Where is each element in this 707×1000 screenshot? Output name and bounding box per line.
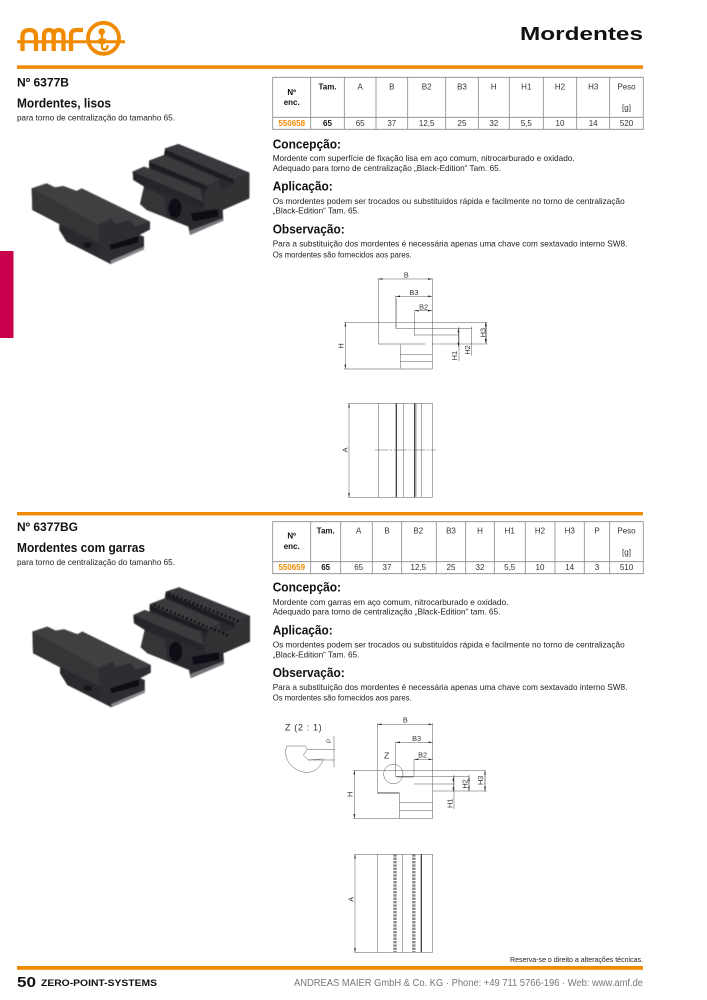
footer rule [17, 966, 643, 970]
technical drawing: 6377BG: B2 [418, 751, 427, 760]
data table: 6377BG [273, 522, 643, 574]
technical drawing: 6377BG: H1 [445, 799, 454, 808]
footer contact line: ANDREAS MAIER GmbH & Co. KG · Phone: +49 711 5766-196 · Web: www.amf.de [294, 978, 643, 989]
technical drawing: 6377B: B [404, 271, 409, 280]
data table: 6377B: 65 [356, 119, 365, 128]
data table: 6377BG: H2 [535, 527, 546, 536]
data table: 6377BG: Tam. [317, 527, 335, 536]
data table: 6377BG: 550659 [278, 563, 306, 572]
technical drawing: 6377BG [285, 716, 487, 952]
text block: description 6377B: Adequado para torno de centralização „Black-Edition“ Tam. 65. [273, 163, 501, 173]
section rule [17, 512, 643, 515]
data table: 6377B: 32 [489, 119, 499, 128]
data table: 6377BG: Peso [617, 527, 636, 536]
technical drawing: 6377B: H2 [463, 345, 472, 355]
text block: description 6377BG: Os mordentes são fornecidos aos pares. [273, 692, 412, 702]
technical drawing: 6377BG: B3 [412, 734, 421, 743]
data table: 6377B: Tam. [318, 82, 337, 91]
product heading: 6377B: para torno de centralização do tamanho 65. [17, 113, 175, 123]
footnote: Reserva-se o direito a alterações técnicas. [510, 955, 643, 964]
text block: description 6377BG: Aplicação: [273, 623, 333, 637]
page number: 50 [17, 974, 36, 991]
technical drawing: 6377BG: B [403, 716, 408, 725]
data table: 6377B: H1 [521, 82, 532, 91]
side tab [0, 251, 14, 338]
footer section label: ZERO-POINT-SYSTEMS [41, 978, 157, 988]
technical drawing: 6377B: H [336, 343, 345, 349]
data table: 6377B: 10 [556, 119, 565, 128]
text block: description 6377BG [273, 581, 627, 702]
technical drawing: 6377BG: A [346, 897, 355, 902]
data table: 6377B: 65 [323, 119, 332, 128]
data table: 6377BG: enc. [284, 542, 300, 551]
product heading: 6377B: Mordentes, lisos [17, 97, 111, 111]
data table: 6377BG: 3 [595, 563, 600, 572]
data table: 6377BG: H [477, 527, 483, 536]
text block: description 6377B [273, 137, 627, 259]
data table: 6377B: B [389, 82, 394, 91]
text block: description 6377BG: Os mordentes podem ser trocados ou substituídos rápida e facilmente no torno de centralização [273, 639, 625, 649]
data table: 6377BG: 25 [447, 563, 456, 572]
photo: jaws with teeth [32, 587, 250, 707]
data table: 6377B: enc. [284, 98, 300, 107]
text block: description 6377BG: Para a substituição dos mordentes é necessária apenas uma chave com sextavado interno SW8. [273, 682, 627, 692]
technical drawing: 6377B: B2 [419, 302, 428, 311]
text block: description 6377BG: Mordente com garras em aço comum, nitrocarburado e oxidado. [273, 597, 508, 607]
data table: 6377B: H3 [588, 82, 599, 91]
product heading: 6377BG: Nº 6377BG [17, 520, 78, 534]
data table: 6377B: [g] [622, 104, 631, 113]
data table: 6377BG: 37 [383, 563, 392, 572]
text block: description 6377B: Mordente com superfície de fixação lisa em aço comum, nitrocarburado e oxidado. [273, 153, 575, 163]
data table: 6377B: Nº [287, 88, 296, 97]
product heading: 6377BG: para torno de centralização do tamanho 65. [17, 557, 175, 567]
data table: 6377BG: 32 [476, 563, 485, 572]
data table: 6377B: B2 [422, 82, 432, 91]
data table: 6377B: H [491, 82, 497, 91]
data table: 6377BG: 14 [565, 563, 575, 572]
data table: 6377B: 520 [620, 119, 634, 128]
data table: 6377B: B3 [457, 82, 467, 91]
technical drawing: 6377BG: H [345, 792, 354, 797]
data table: 6377BG: 10 [536, 563, 545, 572]
data table: 6377BG: 65 [321, 563, 331, 572]
data table: 6377BG: H3 [565, 527, 575, 536]
technical drawing: 6377BG: H3 [476, 776, 485, 785]
text block: description 6377B: Concepção: [273, 137, 341, 151]
logo: amf [17, 23, 125, 54]
text block: description 6377B: Para a substituição dos mordentes é necessária apenas uma chave com sextavado interno SW8. [273, 239, 627, 249]
text block: description 6377B: Os mordentes podem ser trocados ou substituídos rápida e facilmente no torno de centralização [273, 196, 625, 206]
page title: Mordentes [520, 24, 643, 44]
data table: 6377BG: 12,5 [411, 563, 427, 572]
data table: 6377B: 5,5 [521, 119, 532, 128]
technical drawing: 6377B [336, 271, 487, 497]
technical drawing: 6377B: A [341, 447, 350, 452]
data table: 6377BG: Nº [287, 531, 296, 540]
technical drawing: 6377B: H3 [478, 328, 487, 337]
photo: smooth jaws [32, 144, 249, 264]
header rule [17, 65, 643, 69]
data table: 6377BG: 65 [354, 563, 364, 572]
data table: 6377B: 550658 [278, 119, 306, 128]
technical drawing: 6377B: H1 [450, 351, 459, 360]
data table: 6377BG: P [594, 527, 600, 536]
data table: 6377BG: 510 [620, 563, 634, 572]
data table: 6377BG: B [384, 527, 390, 536]
product heading: 6377B [17, 76, 175, 123]
data table: 6377B [273, 77, 643, 129]
data table: 6377B: 12,5 [419, 119, 435, 128]
text block: description 6377B: Aplicação: [273, 180, 333, 194]
data table: 6377BG: B3 [446, 527, 456, 536]
text block: description 6377BG: Adequado para torno de centralização „Black-Edition“ tam. 65. [273, 606, 500, 616]
technical drawing: 6377BG: Z [384, 751, 390, 761]
text block: description 6377BG: Concepção: [273, 581, 341, 595]
product heading: 6377BG [17, 520, 175, 567]
text block: description 6377B: Os mordentes são fornecidos aos pares. [273, 249, 412, 259]
data table: 6377B: Peso [617, 82, 636, 91]
data table: 6377BG: [g] [622, 548, 631, 557]
data table: 6377BG: B2 [413, 527, 424, 536]
technical drawing: 6377BG: H2 [460, 779, 469, 789]
data table: 6377B: H2 [555, 82, 566, 91]
data table: 6377BG: 5,5 [504, 563, 516, 572]
text block: description 6377BG: „Black-Edition“ Tam. 65. [273, 649, 359, 659]
data table: 6377B: 25 [458, 119, 467, 128]
product heading: 6377B: Nº 6377B [17, 76, 69, 90]
text block: description 6377BG: Observação: [273, 666, 345, 680]
data table: 6377B: 37 [387, 119, 397, 128]
product heading: 6377BG: Mordentes com garras [17, 541, 145, 555]
text block: description 6377B: Observação: [273, 222, 345, 236]
data table: 6377BG: H1 [505, 527, 515, 536]
data table: 6377B: 14 [589, 119, 598, 128]
data table: 6377BG: A [356, 527, 362, 536]
text block: description 6377B: „Black-Edition“ Tam. 65. [273, 205, 359, 215]
technical drawing: 6377BG: P [327, 739, 333, 743]
technical drawing: 6377BG: Z (2 : 1) [285, 723, 322, 733]
technical drawing: 6377B: B3 [410, 288, 418, 297]
data table: 6377B: A [358, 82, 364, 91]
